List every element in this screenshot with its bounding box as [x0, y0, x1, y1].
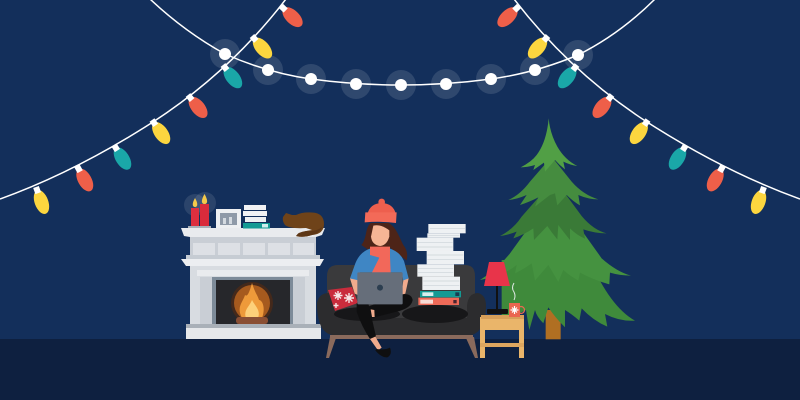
- cat: [283, 212, 324, 237]
- red cushion with snowflakes: [328, 287, 358, 311]
- tree layer 3: [500, 190, 607, 240]
- woman on the sofa working on a laptop: [350, 199, 413, 357]
- sofa: [317, 265, 486, 358]
- face: [371, 225, 389, 246]
- mug with steam: [509, 283, 524, 317]
- fire: [231, 282, 273, 324]
- picture frame: [216, 209, 241, 228]
- sweater: [350, 248, 409, 281]
- right bulb string: [494, 0, 800, 216]
- hat: [365, 199, 397, 223]
- scarf: [370, 247, 391, 272]
- trunk: [546, 310, 561, 339]
- ankle: [371, 309, 375, 317]
- laptop: [357, 272, 403, 304]
- tree layer 4: [480, 223, 631, 284]
- side table: [480, 315, 524, 358]
- left bulb string: [0, 0, 306, 216]
- fireplace: [181, 228, 325, 339]
- crossed legs: [360, 294, 413, 318]
- globe light string: [150, 0, 655, 100]
- tree layer 2: [508, 157, 598, 207]
- stack of paper and binders: [417, 224, 466, 305]
- christmas tree: [480, 118, 635, 339]
- table lamp: [484, 262, 510, 314]
- floor: [0, 339, 800, 400]
- candles: [184, 192, 216, 228]
- tree layer 1: [521, 118, 577, 172]
- hair: [361, 223, 407, 260]
- hands: [350, 278, 409, 296]
- lower leg: [357, 299, 376, 339]
- books on mantel: [243, 205, 270, 228]
- tree layer 5: [502, 260, 635, 330]
- foot and shoe: [370, 337, 382, 350]
